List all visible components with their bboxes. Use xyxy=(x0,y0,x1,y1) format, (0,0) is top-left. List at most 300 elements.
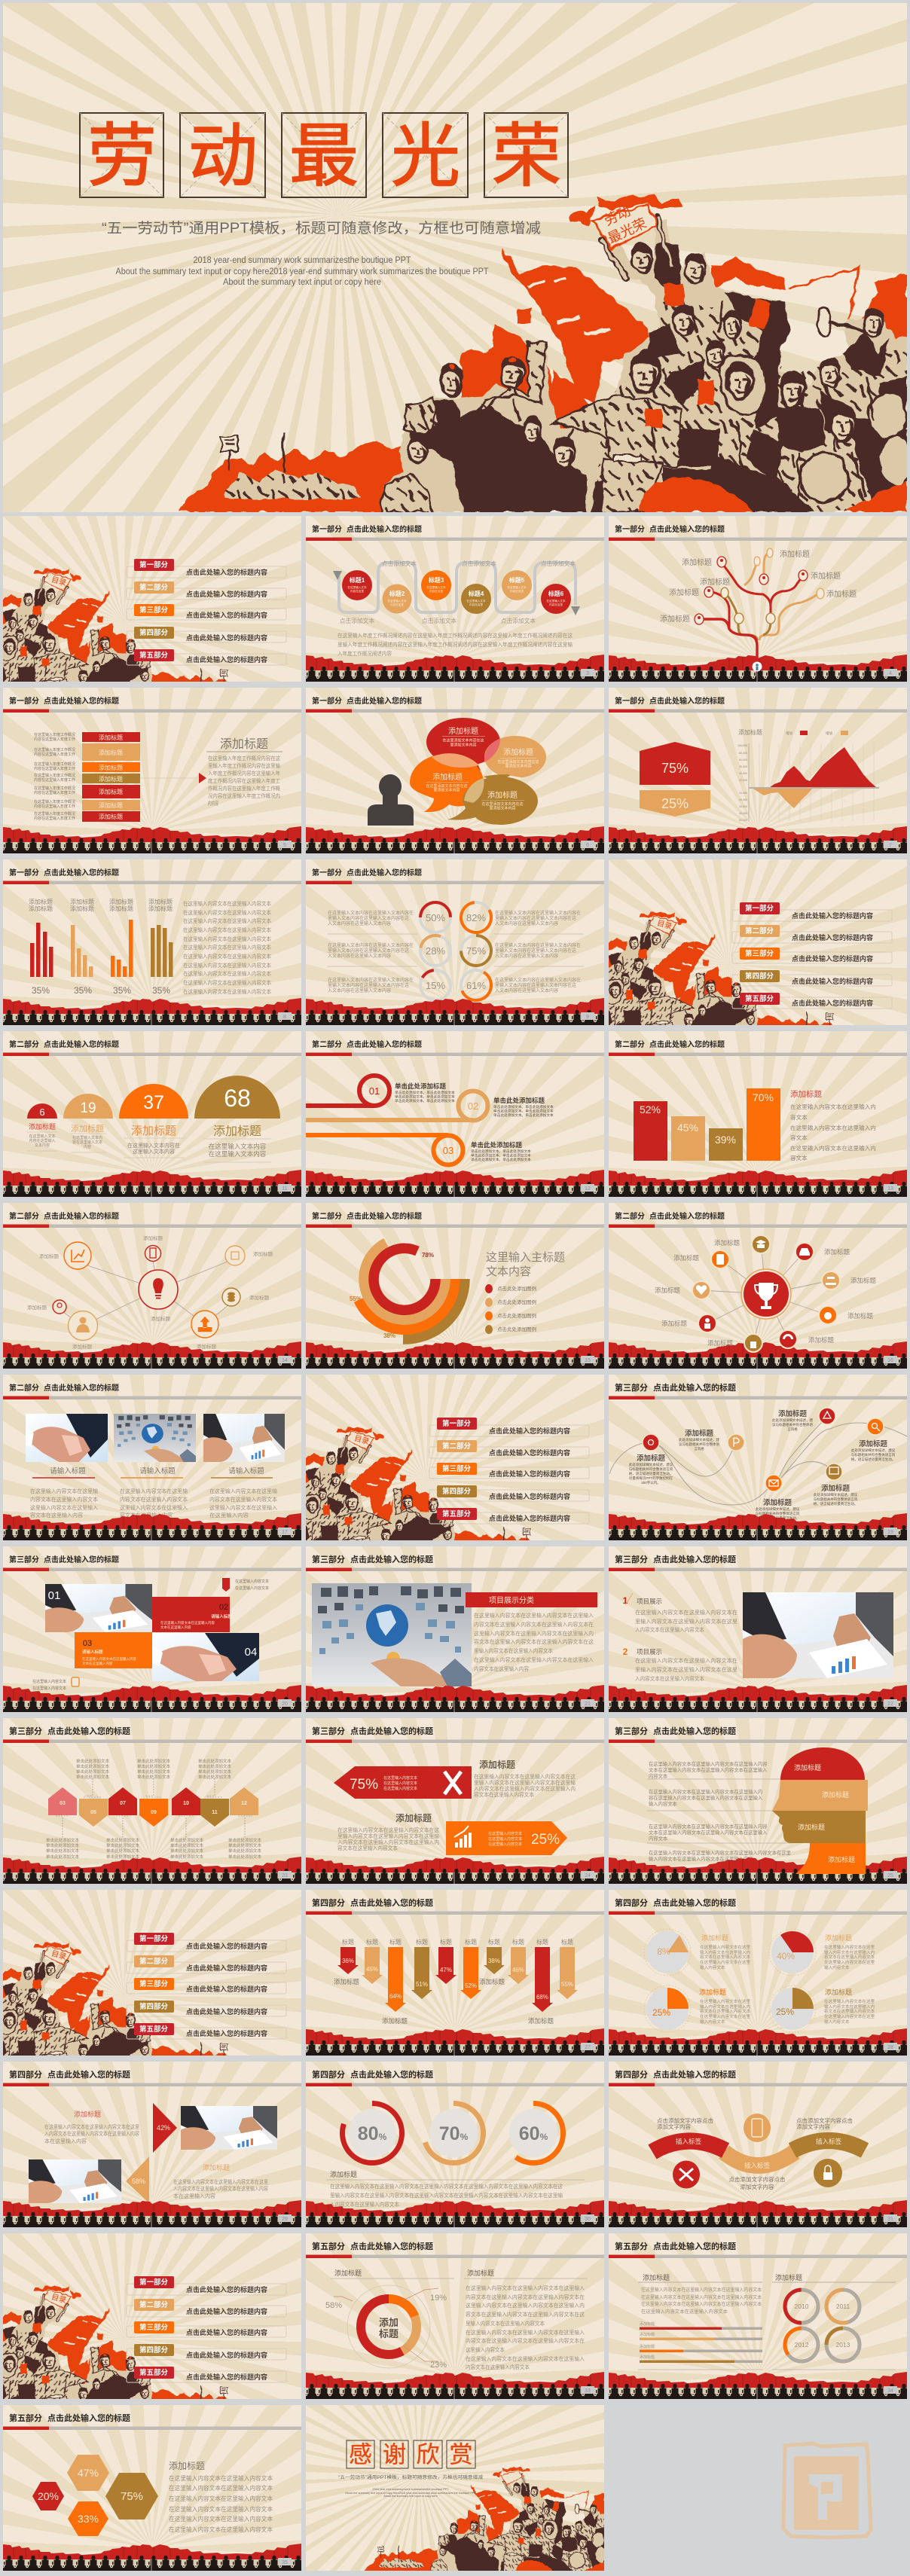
slide 5: stacked labels xyxy=(3,688,301,853)
arrow captions: 添加标题 xyxy=(479,1978,505,1985)
arrow percentages: 64% xyxy=(389,1993,402,2000)
banner label: 目录 xyxy=(656,919,673,931)
page number xyxy=(884,1184,897,1192)
arrow captions: 添加标题 xyxy=(334,1978,359,1985)
timeline nodes: 在这里输入文本 xyxy=(507,585,527,589)
semicircles: 68 xyxy=(224,1085,251,1112)
title boxes xyxy=(347,2440,475,2468)
ring values: 82% xyxy=(466,912,486,923)
hexagons: 20% xyxy=(38,2490,59,2502)
body text: 在这里输入内容文本在这里输入内容文本在这里输入 xyxy=(466,2329,585,2336)
page number xyxy=(278,841,292,848)
right body text xyxy=(208,755,280,807)
column 2 text: 在这里输入内容文本在这里输 xyxy=(120,1488,188,1494)
leader lines and values xyxy=(325,2288,447,2370)
english description: 2018 year-end summary work summarizesthe boutique PPT xyxy=(372,2488,449,2491)
progress bars: 添加标题 xyxy=(640,2344,655,2349)
contents list: 点击此处输入您的标题内容 xyxy=(186,1985,267,1993)
red banner title and text: 在这里输入内容文本在这里输入内容文本在这 xyxy=(474,1773,576,1780)
node labels: 添加标题 xyxy=(72,1343,92,1350)
area chart: 20,000 xyxy=(739,798,747,801)
titles xyxy=(29,1122,261,1138)
crowd band xyxy=(609,2028,907,2056)
top captions: 单击此处添加文本 xyxy=(198,1763,231,1769)
heading: 点击此处输入您的标题 xyxy=(653,1554,736,1564)
area chart: 60,000 xyxy=(739,758,747,762)
orange banner title and text: 添加标题 xyxy=(395,1812,432,1824)
chart legend: 增加 xyxy=(826,731,832,736)
page number xyxy=(884,2043,897,2050)
area chart: 80,000 xyxy=(739,752,747,755)
descriptions: 在这里输入文本内容 xyxy=(209,1143,267,1150)
contents list: 第五部分 xyxy=(745,994,774,1003)
heading: 第五部分 xyxy=(312,2241,345,2251)
area chart: 40,000 xyxy=(739,765,747,768)
banner: 项目展示分类 xyxy=(489,1595,534,1605)
heading: 第四部分 xyxy=(312,2069,345,2080)
nodes xyxy=(53,1242,245,1341)
right descriptions: 入文本内容在这里输入文本内容 xyxy=(495,920,558,926)
crowd band xyxy=(306,826,604,853)
right descriptions: 在这里输入文本内容在这里输入文本内容在 xyxy=(495,942,581,948)
crowd band xyxy=(3,1341,301,1369)
page number xyxy=(581,841,594,848)
arrow top labels: 标题 xyxy=(366,1938,378,1946)
node labels: 添加标题 xyxy=(714,1239,740,1247)
slide 17: three photo columns xyxy=(3,1375,301,1540)
pie descriptions: 在这里输入内容文本在这里 xyxy=(700,1959,751,1965)
stacked boxes: 添加标题 xyxy=(99,749,123,756)
left small text: 在这里输入年度工作概况 xyxy=(34,773,75,778)
top captions: 单击此处添加文本 xyxy=(76,1763,109,1769)
text blocks: 内容文本 xyxy=(649,1835,668,1842)
percent values: 35% xyxy=(152,985,170,996)
pie descriptions: 在这里输入内容文本在这里 xyxy=(824,1998,875,2004)
ribbon descriptions: 添加文字内容 xyxy=(740,2183,774,2190)
stacked boxes: 添加标题 xyxy=(99,764,123,771)
page number: 27 xyxy=(585,2045,591,2050)
year labels: 2011 xyxy=(836,2303,850,2310)
heading: 第三部分 xyxy=(312,1554,345,1564)
captions: 添加标题 xyxy=(778,1409,807,1418)
contents list: 点击此处输入您的标题内容 xyxy=(186,2351,267,2359)
column 2 text: 内容文本在这里输入内容文本 xyxy=(120,1496,188,1503)
red banner title and text: 里输入内容文本在这里输入内容文本在这里输 xyxy=(474,1779,576,1786)
column chart: 70% xyxy=(753,1091,774,1103)
contents list: 第一部分 xyxy=(139,560,168,569)
heading xyxy=(3,1211,301,1228)
page number xyxy=(884,1356,897,1363)
timeline nodes: 在这里输入文本 xyxy=(466,599,486,603)
bottom captions: 单击此处添加文本 xyxy=(228,1854,261,1860)
right descriptions: 里输入文本内容在这里输入文本内容在这 xyxy=(495,948,576,954)
heading: 点击此处输入您的标题 xyxy=(649,1211,725,1221)
node labels: 添加标题 xyxy=(850,1277,876,1284)
bar labels: 添加标题 xyxy=(29,898,53,905)
upper text: 在这里输入内容文本在这里输入内容文本在这里 xyxy=(44,2123,139,2130)
card 03: 请输入标题 xyxy=(82,1649,103,1655)
captions: 添加标题 xyxy=(821,1484,850,1493)
timeline labels: 点击添加文本 xyxy=(541,560,576,567)
pie descriptions: 输入内容文本在这里输入内 xyxy=(824,1949,875,1955)
description xyxy=(790,1103,876,1161)
title boxes: 感 xyxy=(349,2442,372,2468)
page number: 17 xyxy=(282,1530,288,1535)
progress bars: 添加标题 xyxy=(640,2321,655,2327)
column 3 text: 这里输入内容文本在这里输入 xyxy=(209,1504,277,1511)
pie 1: 8% xyxy=(657,1946,670,1957)
semicircles: 6 xyxy=(39,1106,45,1118)
heading xyxy=(3,1039,301,1056)
ribbon descriptions: 点击添加文字内容点击 xyxy=(796,2117,853,2124)
heading: 第二部分 xyxy=(9,1211,39,1221)
heading: 点击此处输入您的标题 xyxy=(350,1897,433,1908)
caption details: 格，语言描述尽量简洁生动。 xyxy=(756,1515,799,1521)
left small text: 在这里输入年度工作概况 xyxy=(34,786,75,791)
arrows xyxy=(337,1947,578,2012)
ribbons xyxy=(652,2141,865,2165)
step 03: 单击此处添加文本。单击此处添加文本 xyxy=(471,1157,531,1162)
item 2: 项目展示 xyxy=(637,1648,662,1656)
heading xyxy=(306,868,604,884)
node labels: 添加标题 xyxy=(27,1304,47,1311)
node labels: 添加标题 xyxy=(707,1339,733,1347)
step 01: 单击此处添加文本。单击此处添加文本 xyxy=(395,1090,455,1095)
heading: 第一部分 xyxy=(615,524,645,534)
semicircles: 37 xyxy=(143,1092,164,1113)
contents list: 第五部分 xyxy=(139,2368,168,2377)
section title: 添加标题 xyxy=(330,2170,357,2178)
hub xyxy=(139,1270,178,1309)
contents list: 第一部分 xyxy=(745,904,774,913)
caption details: 格，语言描述尽量简洁生动。 xyxy=(851,1457,895,1462)
ribbon descriptions: 添加文字内容 xyxy=(796,2123,830,2130)
column 1 text: 这里输入内容文本在这里输入 xyxy=(30,1504,98,1511)
legend: 点击此处添加图例 xyxy=(497,1312,536,1319)
arrow percentages: 45% xyxy=(366,1966,378,1973)
ring 70 percent xyxy=(423,2103,484,2163)
title boxes: 谢 xyxy=(383,2442,406,2468)
text blocks: 内容文本 xyxy=(649,1772,668,1779)
page number: 7 xyxy=(889,843,892,848)
heading: 第三部分 xyxy=(615,1554,648,1564)
heading: 点击此处输入您的标题 xyxy=(653,1897,736,1908)
card 02 xyxy=(152,1597,232,1632)
slide 22: two items with photo xyxy=(609,1546,907,1712)
year labels: 2012 xyxy=(795,2341,809,2349)
step 01: 单击此处添加文本。单击此处添加文本 xyxy=(395,1094,455,1100)
page number: 31 xyxy=(887,2217,893,2222)
heading: 第五部分 xyxy=(9,2413,42,2423)
page number xyxy=(884,1528,897,1535)
banner text on illustration: 劳动 xyxy=(602,203,633,228)
body text: 内容文本在这里输入内容文本在这里输入内容文本在 xyxy=(466,2294,585,2300)
trophy hub xyxy=(741,1269,791,1319)
bottom captions: 单击此处添加文本 xyxy=(46,1848,79,1854)
arc labels: 78% xyxy=(422,1252,434,1259)
photo 01 xyxy=(45,1584,152,1632)
note bottom left xyxy=(32,1677,79,1691)
descriptions: 内容在这里输入 xyxy=(29,1138,56,1143)
timeline labels: 点击添加文本 xyxy=(422,617,457,624)
bottom captions: 单击此处添加文本 xyxy=(46,1842,79,1848)
left descriptions xyxy=(328,910,414,993)
heading: 第一部分 xyxy=(312,696,342,706)
crowd band xyxy=(306,1341,604,1369)
heading xyxy=(609,524,907,541)
bar labels: 添加标题 xyxy=(109,898,133,905)
bubble red: 里添加文本内容 xyxy=(450,743,477,747)
column headers: 添加标题 xyxy=(334,2269,362,2277)
page number: 11 xyxy=(282,1186,288,1192)
step 02 xyxy=(306,1091,554,1121)
bubble red: 添加标题 xyxy=(448,726,478,736)
column 1 text: 容文本在这里输入内容 xyxy=(30,1512,83,1518)
slide 18: table of contents xyxy=(306,1375,604,1540)
heading xyxy=(306,1554,604,1571)
crowd band xyxy=(3,1857,301,1884)
left descriptions: 里输入文本内容在这里输入文本内容在这 xyxy=(328,948,409,954)
contents list: 点击此处输入您的标题内容 xyxy=(489,1470,570,1478)
heading: 第二部分 xyxy=(312,1211,342,1221)
semicircles: 19 xyxy=(80,1100,96,1116)
timeline labels: 点击添加文本 xyxy=(340,617,374,624)
arrow captions: 添加标题 xyxy=(528,2017,554,2025)
caption details: 此处添加详细文本描述，建 xyxy=(679,1437,719,1442)
pie descriptions: 输入内容文本 xyxy=(824,1964,850,1970)
body text xyxy=(474,1612,594,1672)
column titles: 请输入标题 xyxy=(139,1467,176,1476)
page number: 28 xyxy=(887,2045,893,2050)
text blocks: 输入内容文本在这里输入内容文本在这里输入内容 xyxy=(649,1855,753,1862)
red banner 75 percent: 在这里输入内容文本 xyxy=(383,1786,417,1791)
page number xyxy=(581,1012,594,1020)
leader lines and values: 23% xyxy=(430,2361,447,2370)
title boxes xyxy=(80,113,568,197)
upper text xyxy=(44,2110,139,2144)
heading: 点击此处输入您的标题 xyxy=(44,868,119,877)
slide 36: thanks ending xyxy=(306,2405,604,2571)
arrow percentages: 36% xyxy=(342,1958,354,1964)
pentagons: 03 xyxy=(60,1801,66,1806)
description: 在这里输入内容文本在这里输入内 xyxy=(790,1103,876,1110)
wavy lines xyxy=(609,1416,907,1505)
heading xyxy=(609,1039,907,1056)
body text: 内容文本在这里输入内容文本 xyxy=(466,2364,530,2370)
hexagons: 75% xyxy=(121,2490,143,2503)
timeline labels: 点击添加文本 xyxy=(382,560,417,567)
legend: 点击此处添加图例 xyxy=(497,1326,536,1332)
english description xyxy=(345,2488,477,2498)
contents list: 点击此处输入您的标题内容 xyxy=(186,2328,267,2336)
page number: 13 xyxy=(887,1186,893,1192)
bubble red: 在这里添加文本内容在这 xyxy=(442,738,484,743)
bubble orange: 里添加文本内容 xyxy=(433,788,460,792)
english description: About the summary text input or copy here xyxy=(223,278,381,287)
pie 3 xyxy=(644,1985,691,2032)
arrow top labels: 标题 xyxy=(536,1938,548,1946)
column 2 text: 容文本在这里输入内容 xyxy=(120,1512,173,1518)
slide 35: hexagons xyxy=(3,2405,301,2571)
body text: 在这里输入内容文本在这里输入内容文本 xyxy=(183,944,271,951)
contents list: 点击此处输入您的标题内容 xyxy=(489,1492,570,1500)
heading: 点击此处输入您的标题 xyxy=(649,1039,725,1049)
pie descriptions: 输入内容文本 xyxy=(824,2019,850,2025)
left descriptions: 在这里输入文本内容在这里输入文本内容在 xyxy=(328,977,414,983)
top captions: 单击此处添加文本 xyxy=(76,1769,109,1775)
arc labels: 38% xyxy=(383,1332,395,1339)
body text: 在这里输入内容文本在这里输入内容文本在这里输入 xyxy=(474,1656,594,1663)
banner label: 目录 xyxy=(50,575,67,588)
contents list: 第二部分 xyxy=(139,1957,168,1966)
column 1 text: 在这里输入内容文本在这里输 xyxy=(30,1488,98,1494)
lower text: 添加标题 xyxy=(203,2163,230,2172)
bottom captions: 单击此处添加文本 xyxy=(228,1842,261,1848)
semicircles xyxy=(27,1076,280,1119)
arrow percentages: 52% xyxy=(465,1982,477,1989)
crowd band xyxy=(3,1513,301,1540)
pentagons: 07 xyxy=(120,1801,126,1806)
crowd band xyxy=(609,1341,907,1369)
top captions: 单击此处添加文本 xyxy=(198,1758,231,1764)
column headers xyxy=(331,2269,588,2278)
titles: 添加标题 xyxy=(71,1123,104,1134)
page number xyxy=(581,1356,594,1363)
bubble tan: 添加标题 xyxy=(503,747,533,757)
step 01: 单击此处添加标题 xyxy=(395,1082,447,1090)
donut label: 添加 xyxy=(379,2317,399,2328)
heading: 第四部分 xyxy=(615,1897,648,1908)
contents list xyxy=(127,559,286,665)
pie 3: 25% xyxy=(652,2007,670,2018)
body text: 在这里输入内容文本在这里输入内容文本 xyxy=(169,2474,273,2482)
body text: 内容文本在这里输入内容 xyxy=(474,1665,529,1672)
title boxes: 劳 xyxy=(87,118,157,195)
head silhouette: 添加标题 xyxy=(822,1790,849,1799)
page number xyxy=(581,2386,594,2394)
right body text: 的内容 xyxy=(208,800,218,807)
chart legend: 添加标题 xyxy=(738,728,762,736)
connectors xyxy=(701,1244,831,1343)
caption details: 此处添加详细文本描述，建议 xyxy=(851,1448,896,1453)
bar chart xyxy=(30,920,173,977)
ring 60 percent xyxy=(503,2103,563,2163)
page number xyxy=(884,669,897,676)
body text: 在这里输入年度工作概况阐述内容在这里输入年度工作概况阐述内容在这里输入年度工作概况阐述内容在这 xyxy=(337,632,573,639)
arrow captions xyxy=(334,1978,554,2025)
orange banner 25 percent: 在这里输入内容文本 xyxy=(488,1831,522,1836)
contents list: 点击此处输入您的标题内容 xyxy=(792,977,873,985)
slide 27: down arrow chart xyxy=(306,1890,604,2056)
column chart: 52% xyxy=(640,1103,661,1116)
slide 3: serpentine timeline xyxy=(306,516,604,682)
heading xyxy=(3,1383,301,1399)
stacked boxes xyxy=(82,732,140,822)
timeline nodes: 在这里输入文本 xyxy=(546,599,566,603)
tree labels: 添加标题 xyxy=(669,588,699,597)
percent values xyxy=(32,985,170,996)
body text: 在这里输入内容文本在这里输入内容文本 xyxy=(183,900,271,907)
pie 4: 25% xyxy=(776,2007,794,2017)
page number: 29 xyxy=(282,2217,288,2222)
contents list xyxy=(429,1418,589,1524)
caption details: 议与标题相关并符合整体语 xyxy=(772,1422,813,1427)
heading: 点击此处输入您的标题 xyxy=(347,696,422,706)
page number: 19 xyxy=(887,1530,893,1535)
node labels: 添加标题 xyxy=(249,1294,270,1301)
right body text: 作概况内容在这里输入年度工作概 xyxy=(208,785,280,792)
pentagons: 09 xyxy=(151,1810,157,1815)
note bottom left: 在这里输入内容文本 xyxy=(32,1686,66,1691)
body text xyxy=(337,632,573,657)
body text: 这里输入内容文本在这里输入内容文本在这里输入内 xyxy=(474,1630,594,1637)
slide 21: project showcase xyxy=(306,1546,604,1712)
title boxes: 欣 xyxy=(416,2442,440,2468)
page number xyxy=(278,2214,292,2222)
body text: 在这里输入内容文本在这里输入内容文本 xyxy=(183,970,271,977)
leader lines and values: 19% xyxy=(430,2294,447,2303)
heading: 点击此处输入您的标题 xyxy=(649,696,725,706)
bottom captions: 单击此处添加文本 xyxy=(46,1854,79,1860)
titles: 添加标题 xyxy=(213,1125,261,1138)
bubble tan xyxy=(484,736,546,784)
body text: 里输入内容文本在这里输入内容文本 xyxy=(474,1647,553,1654)
bubble tan: 里添加文本内容 xyxy=(505,764,532,768)
heading: 第一部分 xyxy=(615,696,645,706)
arrow percentages: 51% xyxy=(416,1981,428,1988)
column headers: 添加标题 xyxy=(775,2273,802,2281)
red banner title and text: 添加标题 xyxy=(479,1759,515,1770)
node labels: 添加标题 xyxy=(143,1235,163,1241)
text blocks xyxy=(649,1760,791,1862)
heading: 第四部分 xyxy=(312,1897,345,1908)
block 25 percent xyxy=(640,790,710,816)
crowd band xyxy=(3,2544,301,2571)
ring 60 percent: 60% xyxy=(519,2123,548,2144)
body text: 内容文本在这里输入内容文本在这里输入内容文本在 xyxy=(466,2337,585,2344)
lower text: 在这里输入内容文本在这里输入内容文本在这里 xyxy=(173,2178,268,2185)
upper text: 本在这里输入内容 xyxy=(44,2138,87,2144)
heading: 第一部分 xyxy=(9,696,39,706)
crowd band xyxy=(306,2372,604,2399)
page number: 25 xyxy=(887,1873,893,1879)
crowd band xyxy=(609,1857,907,1884)
right title: 添加标题 xyxy=(220,737,268,751)
arrow top labels: 标题 xyxy=(440,1938,452,1946)
arrow percentages xyxy=(342,1958,573,2001)
step 02: 02 xyxy=(468,1100,478,1112)
body text: 在这里输入内容文本在这里输入内容文本 xyxy=(641,2309,728,2315)
caption details: 此处添加详细文本描述，建议 xyxy=(814,1492,858,1497)
caption details xyxy=(629,1418,896,1521)
red banner title and text: 入内容文本在这里输入内容文本在这里输入内 xyxy=(474,1785,576,1792)
heading xyxy=(609,1554,907,1571)
heading: 点击此处输入您的标题 xyxy=(350,1726,433,1736)
pentagons: 11 xyxy=(212,1810,218,1815)
pie descriptions: 输入内容文本 xyxy=(700,2019,725,2025)
slide 6: speech bubbles xyxy=(306,688,604,853)
top captions: 单击此处添加文本 xyxy=(198,1769,231,1775)
arrow percentages: 55% xyxy=(561,1981,573,1988)
crowd band xyxy=(609,1685,907,1712)
body text: 在这里输入内容文本在这里输入内容文本 xyxy=(183,979,271,986)
illustration: mirrored crowd xyxy=(0,568,245,702)
slide 32: table of contents xyxy=(3,2233,301,2399)
descriptions: 文本内容 xyxy=(35,1143,50,1148)
text blocks: 在这里输入内容文本在这里输入内容文本在这里输入内容文本在这里 xyxy=(649,1849,791,1856)
percent values: 35% xyxy=(32,985,50,996)
crowd band xyxy=(609,2200,907,2227)
